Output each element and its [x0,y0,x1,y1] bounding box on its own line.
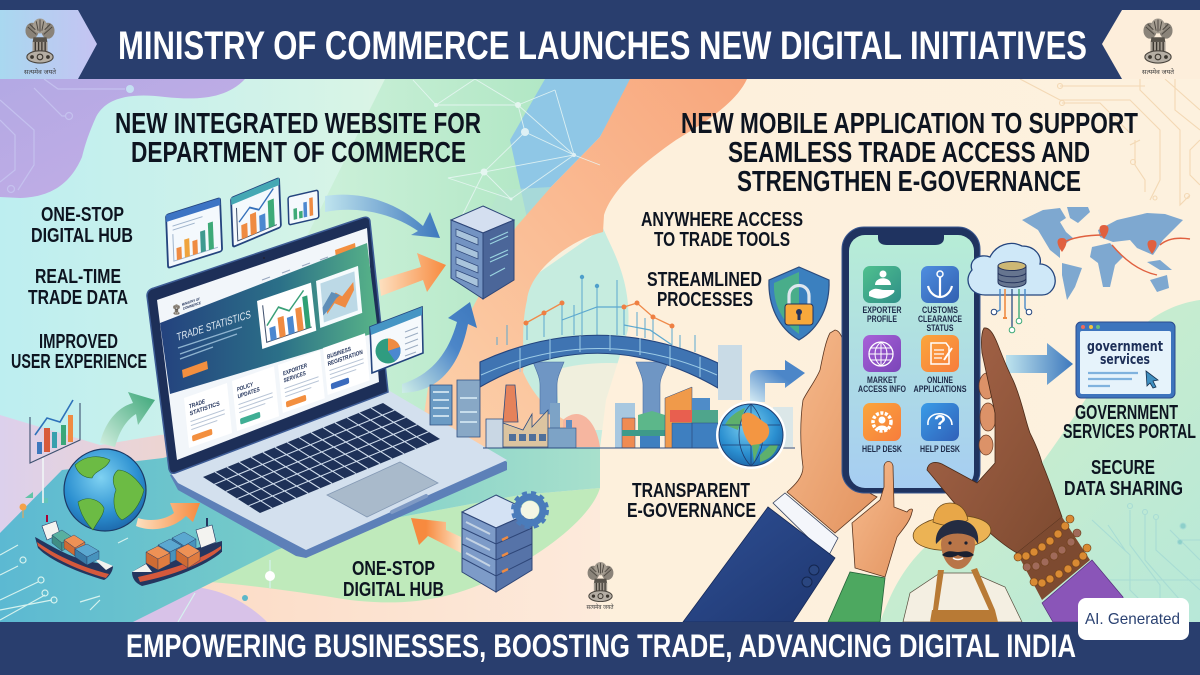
label: real-time trade data [28,266,128,309]
app: market access info [858,335,906,395]
nav bar: COMMERCE [183,301,202,311]
right hand holding phone [927,328,1125,622]
hero map card [316,266,362,328]
service card: trade statistics: TRADE [189,398,205,411]
emblem motto right: सत्यमेव जयते [1142,68,1174,76]
bead bracelets [1014,515,1091,587]
app: exporter profile [862,266,902,325]
app: customs clearance status: CLEARANCE [918,314,962,325]
face [936,520,978,569]
gear [513,493,547,527]
label: streamlined processes: PROCESSES [657,289,753,311]
decorative circuit traces top left [0,79,134,192]
app: help desk question [920,403,960,455]
app: market access info: ACCESS INFO [858,384,906,395]
label: improved user experience: USER EXPERIENCE [11,351,147,373]
arrow: server to laptop orange [411,518,461,553]
arrow: laptop to server blue [402,302,477,393]
label: transparent e-governance: TRANSPARENT [632,480,750,502]
small marker decorations [20,492,48,518]
decorative circuit traces top right [1020,79,1200,205]
pointing hand [828,462,913,622]
floating pie chart card [370,307,423,373]
service card: exporter services: SERVICES [283,370,306,385]
cargo ship right [132,518,222,586]
portal text [1087,339,1163,368]
label: improved user experience: IMPROVED [39,331,118,353]
AI generated badge: AI. Generated [1085,611,1180,628]
header band [0,0,1200,79]
service card: trade statistics: STATISTICS [189,400,220,418]
laptop lid [147,217,388,473]
app: customs clearance status: STATUS [926,323,954,334]
floating chart card 1 [166,198,222,268]
purple sleeve [1042,560,1125,622]
floating chart card 3 [288,190,319,225]
skyline right [718,345,742,400]
arrow: bent blue arrow to phone [750,360,805,402]
fingers [979,373,996,455]
label: one-stop digital hub: ONE-STOP [41,204,124,226]
phone notch [878,235,944,245]
hero chart card [257,283,316,349]
app: help desk question: ? [934,412,946,434]
label: streamlined processes [647,269,762,311]
factory [486,419,503,448]
suit sleeve [683,507,835,622]
heading: mobile application [681,108,1138,198]
app: help desk question: HELP DESK [920,444,960,455]
arrow: globe to laptop orange [136,503,200,529]
shirt [903,573,1022,622]
app: customs clearance status [918,266,962,334]
app: exporter profile: PROFILE [867,314,897,325]
green sleeve [828,572,885,622]
bridge and skyline [430,275,795,448]
heading: mobile application: SEAMLESS TRADE ACCESS AND [728,137,1090,169]
label: streamlined processes: STREAMLINED [647,269,762,291]
left hand holding phone [787,330,877,533]
label: one-stop digital hub lower [343,558,444,601]
decorative circuit traces bottom right [1090,504,1200,620]
label: anywhere access: TO TRADE TOOLS [654,229,790,251]
label: one-stop digital hub lower: DIGITAL HUB [343,579,444,601]
icon: cloud database [968,243,1055,333]
app: exporter profile: EXPORTER [862,305,902,316]
portal text: government [1087,339,1163,355]
decorative circuit traces bottom left [0,538,275,622]
small data chart on pole [30,400,80,503]
label: real-time trade data: REAL-TIME [35,266,121,288]
label: real-time trade data: TRADE DATA [28,287,128,309]
icon: national emblem left [25,18,55,63]
icon: globe with India [716,401,786,469]
service card: trade statistics [184,383,232,448]
label: transparent e-governance: E-GOVERNANCE [627,500,756,522]
label: anywhere access: ANYWHERE ACCESS [641,209,803,231]
world map [1022,207,1190,300]
icon: server bottom with gear [462,493,547,592]
bridge pillars [533,362,668,414]
hero banner [160,243,378,394]
hero heading: TRADE STATISTICS [176,309,251,344]
service card: exporter services: EXPORTER [283,362,308,378]
skyline left [430,380,480,437]
service card: policy updates: UPDATES [237,386,260,401]
laptop screen [157,228,379,460]
arrow: charts to server [325,195,440,238]
heading: integrated website [115,108,481,169]
label: anywhere access [641,209,803,251]
nav bar [173,243,356,315]
government services portal window [1076,322,1175,398]
heading: mobile application: STRENGTHEN E-GOVERNANCE [737,166,1081,198]
label: transparent e-governance [627,480,756,522]
left emblem tab [0,10,97,79]
arrow: globe to laptop green [100,392,155,447]
nav bar: MINISTRY OF [182,297,201,307]
label: improved user experience [11,331,147,373]
service card: policy updates: POLICY [237,381,254,394]
emblem motto centre: सत्यमेव जयते [586,603,614,611]
label: secure data sharing [1064,457,1183,500]
cargo ship left [35,515,113,580]
service card: business registration: REGISTRATION [327,349,363,368]
label: one-stop digital hub: DIGITAL HUB [31,225,133,247]
decorative network lines [413,79,600,220]
heading: integrated website: NEW INTEGRATED WEBSITE FOR [115,108,481,140]
service card: exporter services [278,350,325,413]
app: help desk gear [862,403,902,455]
app: help desk gear: HELP DESK [862,444,902,455]
app: customs clearance status: CUSTOMS [922,305,958,316]
AI generated badge [1078,598,1189,640]
label: one-stop digital hub lower: ONE-STOP [352,558,435,580]
laptop [147,217,507,558]
hat [912,503,992,553]
keyboard [203,403,440,513]
icon: server top [451,206,514,299]
footer band [0,622,1200,675]
emblem motto left: सत्यमेव जयते [24,68,56,76]
label: secure data sharing: SECURE [1091,457,1155,479]
service card: business registration [323,333,370,395]
forearm [1017,517,1090,600]
service card: business registration: BUSINESS [327,346,351,361]
icon: cursor [1146,371,1158,388]
app: online applications: APPLICATIONS [914,384,966,395]
label: one-stop digital hub [31,204,133,247]
apron [930,568,998,622]
icon: national emblem right [1143,18,1173,63]
icon: earth globe [64,449,146,531]
laptop base [170,392,507,558]
app: online applications: ONLINE [927,375,953,386]
service card: policy updates [232,366,279,431]
palm and thumb [927,328,1062,553]
icon: shield with lock [769,267,829,340]
white shirt cuff [773,493,838,557]
portal text: services [1100,352,1150,368]
right emblem tab [1102,10,1200,79]
bridge deck [480,335,718,388]
app: online applications [914,335,966,395]
trackpad [327,462,438,517]
label: government services portal [1063,402,1196,443]
data line overlay [497,275,695,352]
app: market access info: MARKET [867,375,897,386]
bottom centre emblem [586,562,614,611]
heading: integrated website: DEPARTMENT OF COMMERCE [131,137,466,169]
floating chart card 2 [231,178,281,247]
laptop latch [392,496,426,512]
arrow: laptop to server orange [379,253,446,296]
farmer figure [903,503,1022,622]
arrow: phone to government portal [1006,343,1073,385]
phone [842,227,980,493]
